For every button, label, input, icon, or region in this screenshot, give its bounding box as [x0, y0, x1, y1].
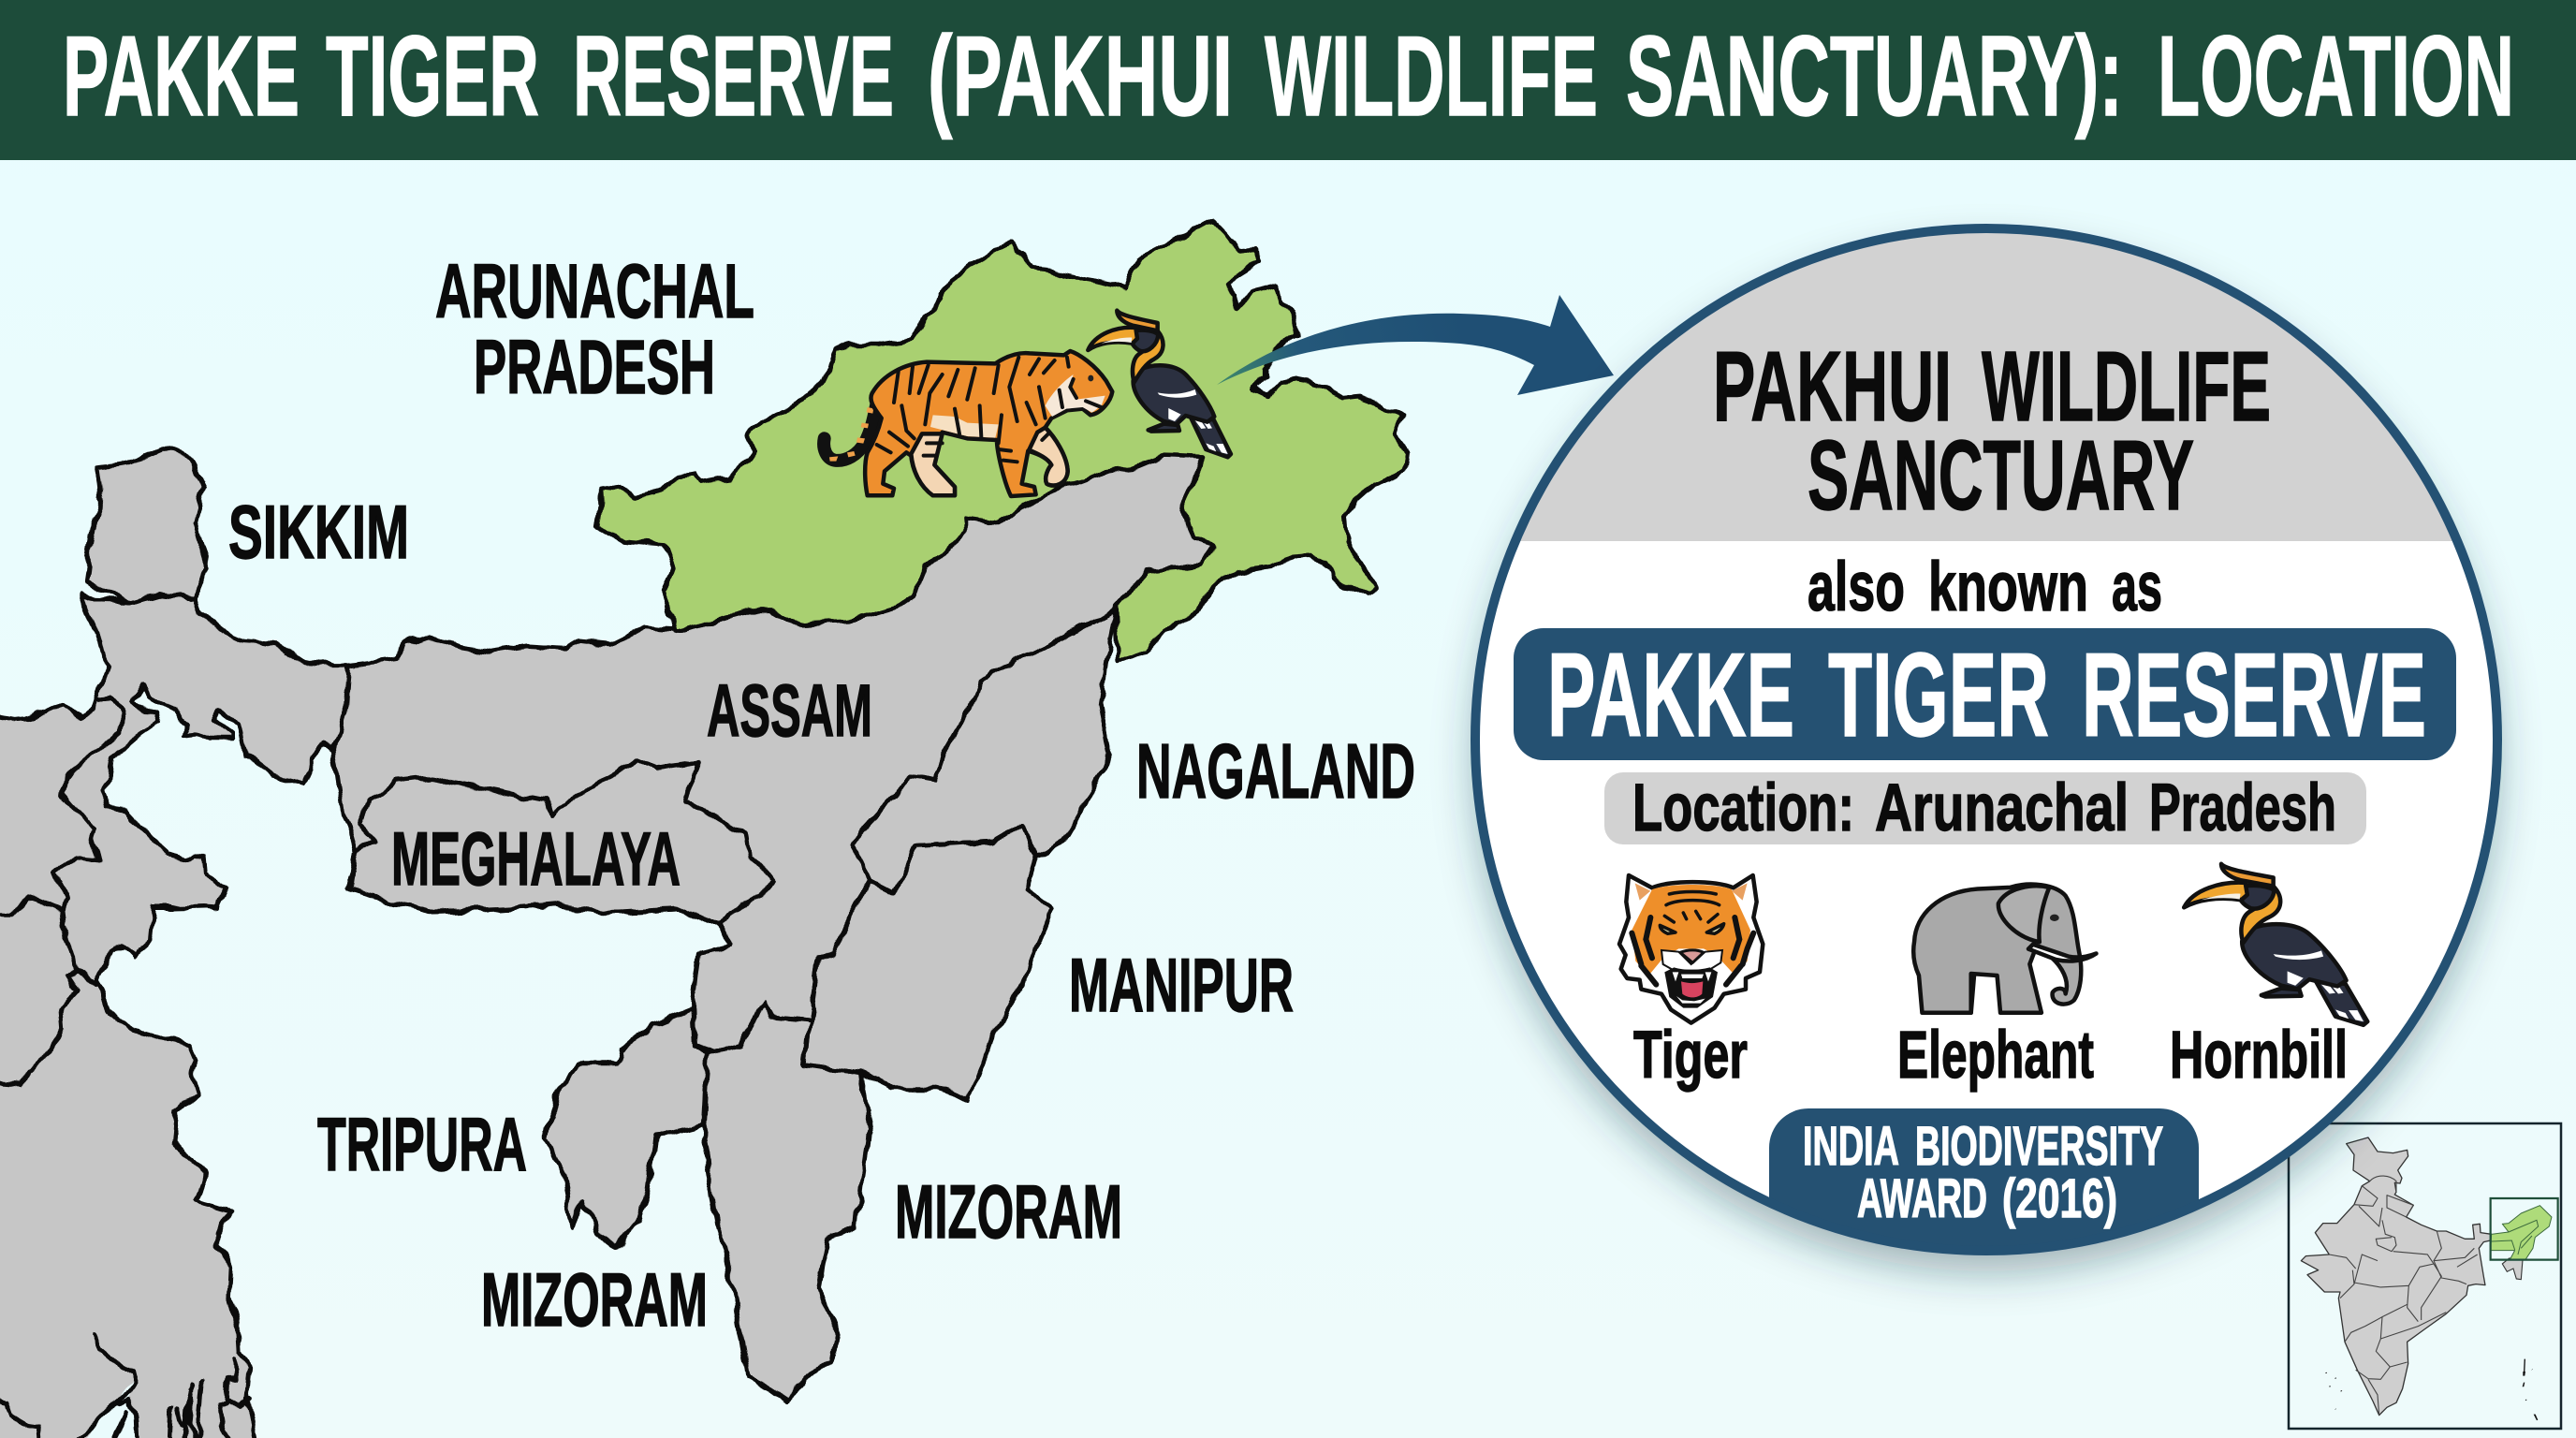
icon: hornbill: [2184, 864, 2367, 1025]
map labels: [228, 249, 1415, 1343]
label: Sikkim: SIKKIM: [228, 491, 409, 575]
badge: India Biodiversity Award: BIODIVERSITY: [1915, 1116, 2163, 1177]
pill: location: Location:: [1632, 771, 1854, 845]
title: (PAKHUI: [928, 12, 1233, 139]
label: Mizoram lower: MIZORAM: [481, 1258, 708, 1343]
banner: Pakke Tiger Reserve: TIGER: [1828, 628, 2049, 761]
region: Sikkim: [85, 448, 208, 602]
region: Manipur: [805, 826, 1050, 1101]
circle base with shadow: [1475, 228, 2497, 1251]
panel: detail circle: [1470, 221, 2503, 1314]
heading band: Pakhui Wildlife Sanctuary: [1520, 233, 2452, 541]
title: RESERVE: [573, 12, 894, 139]
region: Arunachal Pradesh: [598, 221, 1407, 664]
label: Tiger: Tiger: [1633, 1019, 1748, 1093]
label: Nagaland: NAGALAND: [1136, 727, 1415, 814]
label: Manipur: MANIPUR: [1069, 944, 1294, 1028]
title: PAKKE: [63, 12, 300, 139]
badge: India Biodiversity Award: (2016): [2002, 1168, 2117, 1229]
title: SANCTUARY):: [1626, 12, 2123, 139]
icon: hornbill on map: [1088, 311, 1231, 457]
label: Assam: ASSAM: [707, 668, 872, 752]
text: also known as: known: [1928, 548, 2088, 625]
title: [63, 12, 2514, 139]
region: river delta: [0, 1334, 250, 1438]
text: also known as: [1808, 548, 2162, 625]
arrow: from Arunachal to detail circle: [1217, 295, 1614, 395]
pill: location: Pradesh: [2149, 771, 2336, 845]
banner: Pakke Tiger Reserve: [1514, 628, 2456, 761]
badge: India Biodiversity Award: INDIA: [1803, 1116, 1899, 1177]
icon: tiger face: [1619, 875, 1763, 1023]
pill: location: Arunachal: [1875, 771, 2129, 845]
label: Arunachal Pradesh: ARUNACHAL: [435, 249, 754, 334]
region: West Bengal, Bihar and Bhutan corridor: [0, 594, 351, 1438]
label: Tripura: TRIPURA: [317, 1103, 527, 1187]
text: also known as: as: [2112, 548, 2162, 625]
region: Tripura: [546, 1009, 708, 1246]
heading band: Pakhui Wildlife Sanctuary: WILDLIFE: [1982, 331, 2271, 442]
region: Nagaland: [851, 610, 1115, 893]
label: Elephant: Elephant: [1897, 1019, 2094, 1093]
title: WILDLIFE: [1265, 12, 1598, 139]
inset: India locator map: [2289, 1123, 2561, 1429]
badge: India Biodiversity Award: AWARD: [1857, 1168, 1987, 1229]
label: Meghalaya: MEGHALAYA: [391, 817, 681, 902]
label: Arunachal Pradesh: PRADESH: [474, 325, 715, 410]
title: TIGER: [326, 12, 539, 139]
region: Meghalaya: [350, 760, 772, 925]
circle outline: [1475, 228, 2497, 1251]
banner: Pakke Tiger Reserve: PAKKE: [1547, 628, 1794, 761]
region: Mizoram: [703, 1005, 870, 1400]
label: Mizoram right: MIZORAM: [895, 1170, 1122, 1255]
region: Assam: [333, 443, 1222, 1052]
icon: walking tiger on map: [824, 351, 1112, 496]
icon: elephant: [1913, 885, 2096, 1013]
title bar: [0, 0, 2576, 160]
label: Arunachal Pradesh: [435, 249, 754, 410]
heading band: Pakhui Wildlife Sanctuary: SANCTUARY: [1808, 420, 2194, 531]
map: northeast India and neighbouring regions: [0, 221, 1407, 1438]
heading band: Pakhui Wildlife Sanctuary: PAKHUI: [1713, 331, 1952, 442]
label: Hornbill: Hornbill: [2170, 1019, 2348, 1093]
badge: India Biodiversity Award: [1769, 1108, 2199, 1246]
pill: location: [1604, 771, 2366, 845]
text: also known as: also: [1808, 548, 1905, 625]
